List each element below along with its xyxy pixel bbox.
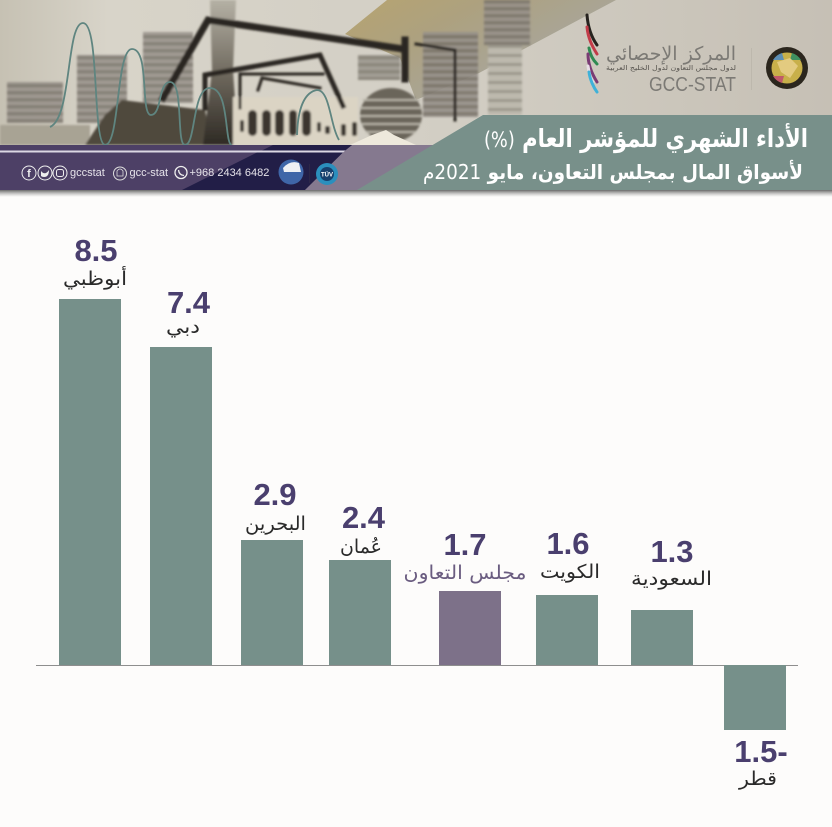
icon: TUV badge bbox=[316, 163, 338, 185]
logo Arabic subtitle: لدول مجلس التعاون لدول الخليج العربية bbox=[606, 64, 736, 72]
palace bbox=[233, 97, 358, 145]
bar: Saudi 1.3 bbox=[631, 534, 712, 665]
bar: Oman 2.4 bbox=[329, 500, 391, 665]
separator bbox=[309, 164, 310, 183]
bar: Qatar -1.5: قطر bbox=[738, 768, 777, 790]
teal line decoration bbox=[50, 23, 339, 145]
skyline towers bbox=[7, 0, 530, 123]
icon: facebook bbox=[22, 166, 36, 180]
decorative tent shape bbox=[345, 0, 616, 100]
bar: Qatar -1.5 bbox=[724, 665, 788, 790]
purple band bbox=[0, 145, 832, 190]
logo Arabic name: المركز الإحصائي bbox=[606, 43, 736, 65]
icon: round seal bbox=[278, 160, 304, 184]
bar: GCC 1.7: مجلس التعاون bbox=[404, 562, 526, 584]
white tent tips bbox=[350, 130, 416, 145]
dark frame structures bbox=[163, 20, 455, 120]
bar chart bbox=[36, 233, 798, 790]
axis line bbox=[36, 665, 798, 666]
icon: GCC emblem bbox=[766, 47, 808, 89]
bar: Bahrain 2.9: البحرين bbox=[245, 513, 306, 535]
icon: snapchat bbox=[114, 167, 126, 180]
bar: Oman 2.4: عُمان bbox=[340, 536, 382, 558]
phone number: +968 2434 6482 bbox=[190, 167, 269, 179]
bar: Kuwait 1.6 bbox=[536, 526, 600, 665]
bar: Saudi 1.3: 1.3 bbox=[650, 534, 694, 569]
icon: facebook: f bbox=[27, 168, 31, 180]
icon: TUV badge: TÜV bbox=[321, 172, 333, 178]
bar: GCC 1.7 bbox=[404, 527, 526, 665]
photo collage bbox=[0, 0, 530, 145]
header banner bbox=[0, 0, 832, 197]
palace arches bbox=[240, 110, 357, 136]
icon: instagram bbox=[53, 166, 67, 180]
logo English name: GCC-STAT bbox=[649, 74, 736, 96]
icon: flag ribbon bbox=[587, 15, 597, 92]
divider bbox=[751, 48, 752, 90]
bar: Oman 2.4: 2.4 bbox=[342, 500, 386, 535]
bar: Saudi 1.3: السعودية bbox=[631, 568, 712, 590]
bar: Dubai 7.4: 7.4 bbox=[167, 285, 211, 320]
icon: twitter bbox=[38, 166, 52, 180]
bar: Abu Dhabi 8.5: 8.5 bbox=[74, 233, 118, 268]
bar: Dubai 7.4 bbox=[150, 285, 212, 665]
bar: GCC 1.7: 1.7 bbox=[443, 527, 487, 562]
foreground ground and hill bbox=[0, 125, 90, 145]
title line 2: لأسواق المال بمجلس التعاون، مايو 2021م bbox=[423, 159, 803, 184]
logo: GCC-STAT bbox=[587, 15, 736, 96]
shadow bbox=[0, 190, 832, 197]
bar: Bahrain 2.9: 2.9 bbox=[253, 477, 297, 512]
bar: Abu Dhabi 8.5 bbox=[59, 233, 127, 665]
handle: gccstat: gccstat bbox=[70, 167, 105, 179]
panel: title background bbox=[357, 115, 832, 190]
icon: whatsapp bbox=[175, 166, 187, 178]
heading: title bbox=[423, 123, 808, 184]
handle: gcc-stat: gcc-stat bbox=[130, 167, 168, 179]
contact bar bbox=[22, 160, 338, 185]
bar: Kuwait 1.6: 1.6 bbox=[546, 526, 590, 561]
bar: Bahrain 2.9 bbox=[241, 477, 306, 665]
striped round building bbox=[360, 88, 422, 142]
bar: Dubai 7.4: دبي bbox=[166, 316, 200, 338]
bar: Kuwait 1.6: الكويت bbox=[540, 561, 600, 583]
central dark tower bbox=[203, 0, 238, 145]
bar: Qatar -1.5: 1.5- bbox=[734, 734, 788, 769]
bar: Abu Dhabi 8.5: أبوظبي bbox=[63, 266, 127, 290]
